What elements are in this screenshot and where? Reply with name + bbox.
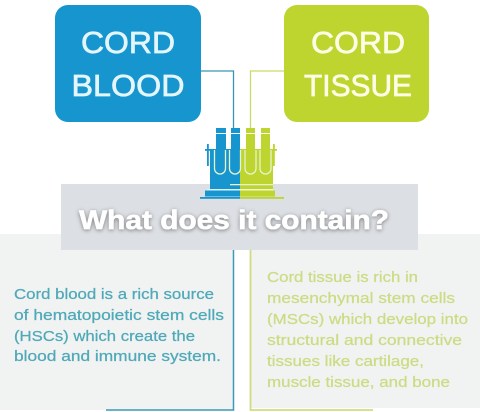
panel: question band (61, 184, 418, 250)
panel: cord tissue box (284, 5, 429, 122)
panel: cord tissue box: TISSUE (304, 68, 412, 103)
panel: lower background left (0, 234, 233, 410)
panel: cord blood box: BLOOD (72, 68, 184, 103)
panel: cord blood box (55, 5, 201, 122)
text: cord tissue description: muscle tissue, and bone (267, 374, 450, 391)
text: cord blood description (14, 286, 224, 365)
panel: lower background right (250, 234, 480, 408)
arrow: green bracket line (250, 250, 373, 410)
heading: what does it contain: What does it contain? (79, 205, 389, 235)
panel: cord tissue box: CORD (311, 25, 405, 60)
text: cord blood description: (HSCs) which create the (14, 328, 195, 345)
arrow: blue bracket line (106, 250, 234, 410)
arrow: green connector to test tubes (250, 71, 284, 130)
text: cord tissue description: structural and connective (267, 332, 462, 349)
text: cord blood description: blood and immune system. (14, 348, 221, 365)
text: cord tissue description: mesenchymal stem cells (267, 290, 455, 307)
arrow: blue connector to test tubes (201, 71, 234, 130)
text: cord tissue description (267, 269, 468, 391)
text: cord tissue description: Cord tissue is rich in (267, 269, 418, 286)
icon: test tube rack (200, 128, 284, 199)
text: cord blood description: Cord blood is a rich source (14, 286, 214, 303)
text: cord blood description: of hematopoietic stem cells (14, 307, 224, 324)
text: cord tissue description: tissues like cartilage, (267, 353, 424, 370)
panel: cord blood box: CORD (81, 25, 175, 60)
text: cord tissue description: (MSCs) which develop into (267, 311, 468, 328)
